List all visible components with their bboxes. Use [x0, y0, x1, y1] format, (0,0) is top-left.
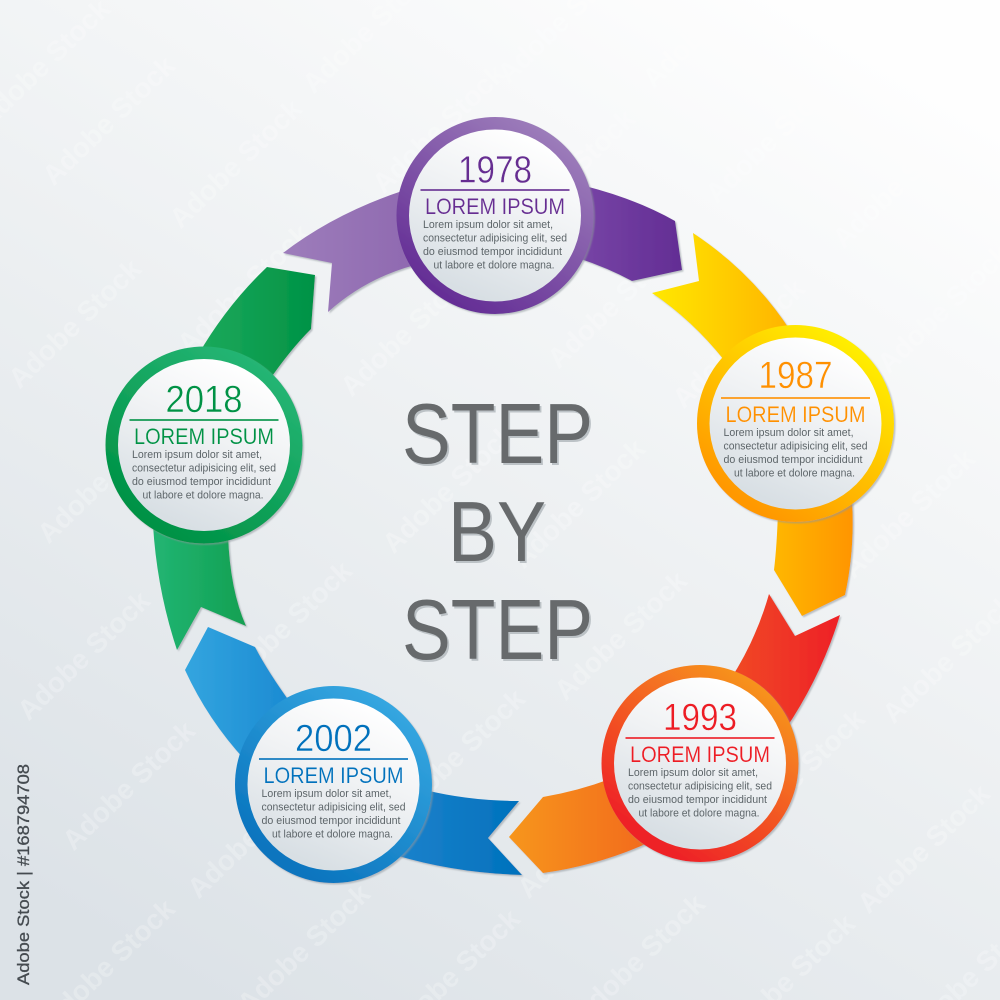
- badge ring: [396, 117, 594, 314]
- heading: LOREM IPSUM: [134, 424, 274, 449]
- body text: do eiusmod tempor incididunt: [423, 246, 562, 258]
- stock watermark pattern: Adobe Stock: [386, 683, 531, 824]
- stock id caption: Adobe Stock | #168794708: [14, 764, 33, 985]
- badge ring: [602, 665, 798, 862]
- year divider: [130, 419, 278, 421]
- body text: Lorem ipsum dolor sit amet,: [423, 219, 553, 231]
- badge inner disc: [248, 698, 420, 870]
- panel: 1978 badge: [396, 117, 594, 314]
- body text: consectetur adipisicing elit, sed: [423, 232, 567, 244]
- year divider: [420, 189, 570, 191]
- badge ring: [697, 325, 894, 522]
- body text: consectetur adipisicing elit, sed: [132, 462, 276, 474]
- stock watermark pattern: Adobe Stock: [726, 703, 871, 844]
- stock watermark pattern: Adobe Stock: [826, 113, 971, 254]
- stock watermark pattern: Adobe Stock: [11, 585, 156, 726]
- stock watermark pattern: Adobe Stock: [366, 58, 511, 199]
- year: 1987: [758, 355, 832, 397]
- panel: 2018 badge: [106, 346, 302, 544]
- body text: [262, 788, 406, 840]
- arrow: red head ribbon: [730, 594, 840, 730]
- body text: ut labore et dolore magna.: [272, 828, 393, 840]
- panel: 2002 badge: [235, 686, 432, 883]
- badge inner disc: [614, 678, 786, 850]
- body text: consectetur adipisicing elit, sed: [262, 802, 406, 814]
- stock watermark pattern: Adobe Stock: [506, 433, 651, 574]
- title: step by step: BY: [450, 487, 548, 582]
- arrow: yellow head ribbon: [652, 233, 790, 360]
- stock watermark pattern: Adobe Stock: [548, 565, 693, 706]
- stock watermark pattern: Adobe Stock: [181, 763, 326, 904]
- title: step by step: STEP: [404, 585, 595, 680]
- body text: do eiusmod tempor incididunt: [724, 454, 862, 466]
- body text: Lorem ipsum dolor sit amet,: [628, 767, 758, 779]
- stock watermark pattern: Adobe Stock: [163, 93, 308, 234]
- body text: ut labore et dolore magna.: [142, 490, 264, 502]
- body text: do eiusmod tempor incididunt: [132, 476, 271, 488]
- stock watermark pattern: Adobe Stock: [56, 715, 201, 856]
- year: 1978: [458, 150, 532, 192]
- stock watermark pattern: Adobe Stock: [31, 408, 176, 549]
- year: 2002: [295, 718, 372, 760]
- body text: consectetur adipisicing elit, sed: [628, 780, 772, 792]
- body text: ut labore et dolore magna.: [434, 260, 554, 272]
- arrow: purple head ribbon: [283, 190, 415, 312]
- year divider: [626, 737, 774, 739]
- title: step by step: [402, 387, 595, 680]
- arrow: blue head ribbon: [395, 790, 522, 875]
- stock watermark pattern: Adobe Stock: [511, 763, 656, 904]
- badge inner disc: [118, 359, 290, 531]
- badge ring: [106, 346, 302, 544]
- heading: LOREM IPSUM: [264, 763, 404, 788]
- arrow: blue tail ribbon: [185, 627, 292, 760]
- stock watermark pattern: Adobe Stock: [851, 778, 996, 919]
- body text: Lorem ipsum dolor sit amet,: [132, 449, 262, 461]
- title: step by step: STEP: [402, 387, 593, 482]
- body text: do eiusmod tempor incididunt: [262, 815, 400, 827]
- stock watermark pattern: Adobe Stock: [666, 273, 811, 414]
- year: 1993: [663, 697, 737, 739]
- badge ring: [235, 686, 432, 883]
- body text: ut labore et dolore magna.: [734, 468, 855, 480]
- stock watermark pattern: Adobe Stock: [36, 50, 181, 191]
- stock watermark pattern: Adobe Stock: [699, 68, 844, 209]
- arrow: orange tail ribbon: [774, 500, 853, 616]
- stock watermark pattern: Adobe Stock: [213, 555, 358, 696]
- panel: 1993 badge: [602, 665, 798, 862]
- heading: LOREM IPSUM: [425, 194, 565, 219]
- arrow: purple tail ribbon: [578, 186, 682, 281]
- body text: Lorem ipsum dolor sit amet,: [724, 427, 854, 439]
- stock watermark pattern: Adobe Stock: [541, 233, 686, 374]
- stock watermark pattern: Adobe Stock: [376, 418, 521, 559]
- heading: LOREM IPSUM: [630, 742, 770, 767]
- body text: do eiusmod tempor incididunt: [628, 794, 767, 806]
- body text: [628, 767, 772, 820]
- badge inner disc: [409, 130, 581, 302]
- title: step by step: STEP: [402, 583, 593, 678]
- stock watermark pattern: Adobe Stock: [2, 253, 147, 394]
- stock watermark pattern: Adobe Stock: [496, 103, 641, 244]
- arrow: green head ribbon: [153, 525, 246, 650]
- body text: [132, 449, 276, 502]
- arrow: green tail ribbon: [198, 267, 315, 382]
- panel: 1987 badge: [697, 325, 894, 522]
- year divider: [259, 758, 408, 760]
- badge inner disc: [710, 338, 882, 510]
- heading: LOREM IPSUM: [726, 402, 866, 427]
- body text: Lorem ipsum dolor sit amet,: [262, 788, 392, 800]
- body text: ut labore et dolore magna.: [638, 808, 760, 820]
- body text: consectetur adipisicing elit, sed: [724, 440, 868, 452]
- arrow: orange tail ribbon bottom: [509, 779, 650, 873]
- stock watermark pattern: Adobe Stock: [334, 261, 479, 402]
- year: 2018: [166, 379, 242, 421]
- stock watermark pattern: Adobe Stock: [171, 218, 316, 359]
- title: step by step: STEP: [404, 389, 595, 484]
- stock watermark pattern: Adobe Stock: [836, 443, 981, 584]
- body text: [423, 219, 567, 272]
- body text: [724, 427, 868, 480]
- year divider: [721, 397, 870, 399]
- title: step by step: BY: [448, 485, 546, 580]
